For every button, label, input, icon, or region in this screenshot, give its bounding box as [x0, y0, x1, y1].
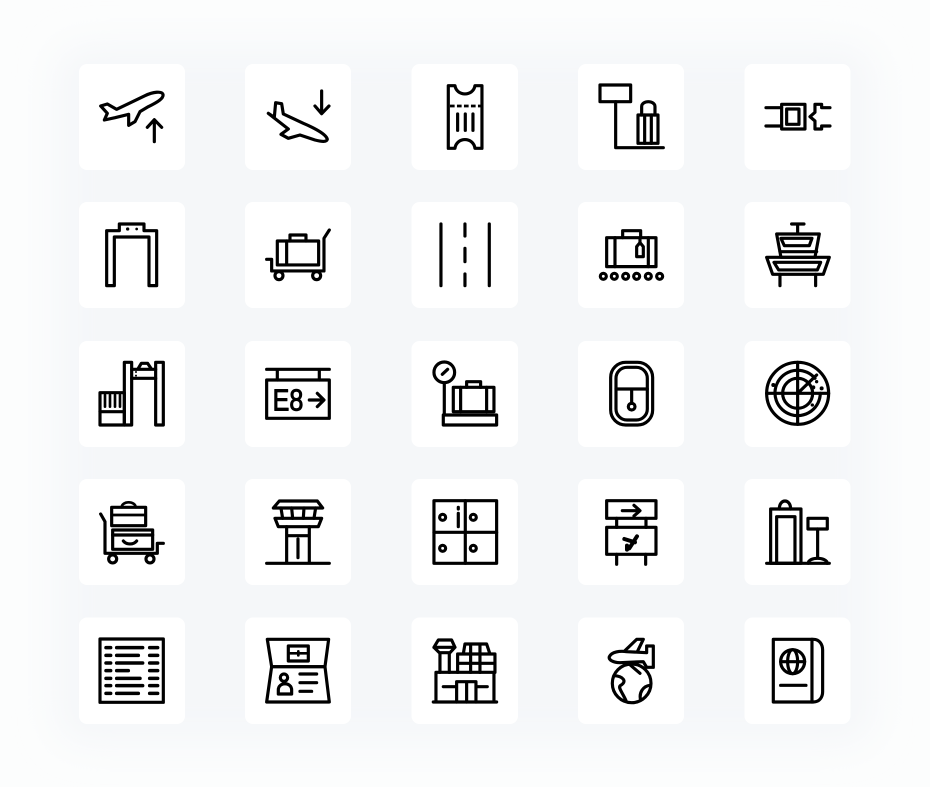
card: takeoff	[79, 64, 185, 170]
icon: sign with luggage	[600, 85, 663, 148]
card: security scanner	[79, 341, 185, 447]
icon: plane landing	[268, 91, 329, 141]
icon: seat belt buckle	[766, 104, 830, 129]
card: passport	[744, 618, 850, 724]
icon: plane over globe	[609, 639, 653, 703]
card: metal detector	[79, 202, 185, 308]
card: seat belt	[744, 64, 850, 170]
card: flight board	[79, 618, 185, 724]
card: baggage scale	[412, 341, 518, 447]
icon: terminal tower	[767, 224, 829, 286]
icon: aircraft window	[611, 362, 653, 425]
card: open passport	[245, 618, 351, 724]
icon: luggage on conveyor	[600, 231, 663, 279]
card: gate sign	[245, 341, 351, 447]
icon: runway lines	[441, 224, 489, 286]
icon: airport building	[433, 640, 497, 702]
card: conveyor	[578, 202, 684, 308]
icon: door and stand	[767, 501, 829, 563]
icon: departures board	[100, 639, 163, 702]
card: security door	[744, 479, 850, 585]
icon: gate E8 sign: E8	[273, 384, 303, 418]
icon: radar screen	[767, 362, 829, 424]
card: radar	[744, 341, 850, 447]
icon: boarding ticket	[448, 86, 482, 148]
card: runway	[412, 202, 518, 308]
icon: walk-through gate	[107, 224, 157, 286]
icon: closed passport	[773, 639, 823, 702]
card: landing	[245, 64, 351, 170]
card: terminal	[744, 202, 850, 308]
card: world travel	[578, 618, 684, 724]
icon: luggage on scale	[434, 362, 497, 425]
icon: trolley with suitcase	[267, 230, 329, 280]
icon: direction signboard	[607, 501, 656, 564]
card: luggage cart	[79, 479, 185, 585]
icon: scanner with baggage belt	[100, 362, 163, 425]
icon: cart with two bags	[101, 502, 163, 563]
card: baggage trolley	[245, 202, 351, 308]
card: lockers	[412, 479, 518, 585]
card: ticket	[412, 64, 518, 170]
icon: open passport	[267, 639, 329, 702]
card: plane window	[578, 341, 684, 447]
card: baggage sign	[578, 64, 684, 170]
card: airport building	[412, 618, 518, 724]
icon: luggage lockers	[434, 501, 497, 563]
card: direction sign	[578, 479, 684, 585]
icon: plane taking off	[101, 92, 163, 142]
icon: air traffic control tower	[267, 501, 329, 563]
card: control tower	[245, 479, 351, 585]
